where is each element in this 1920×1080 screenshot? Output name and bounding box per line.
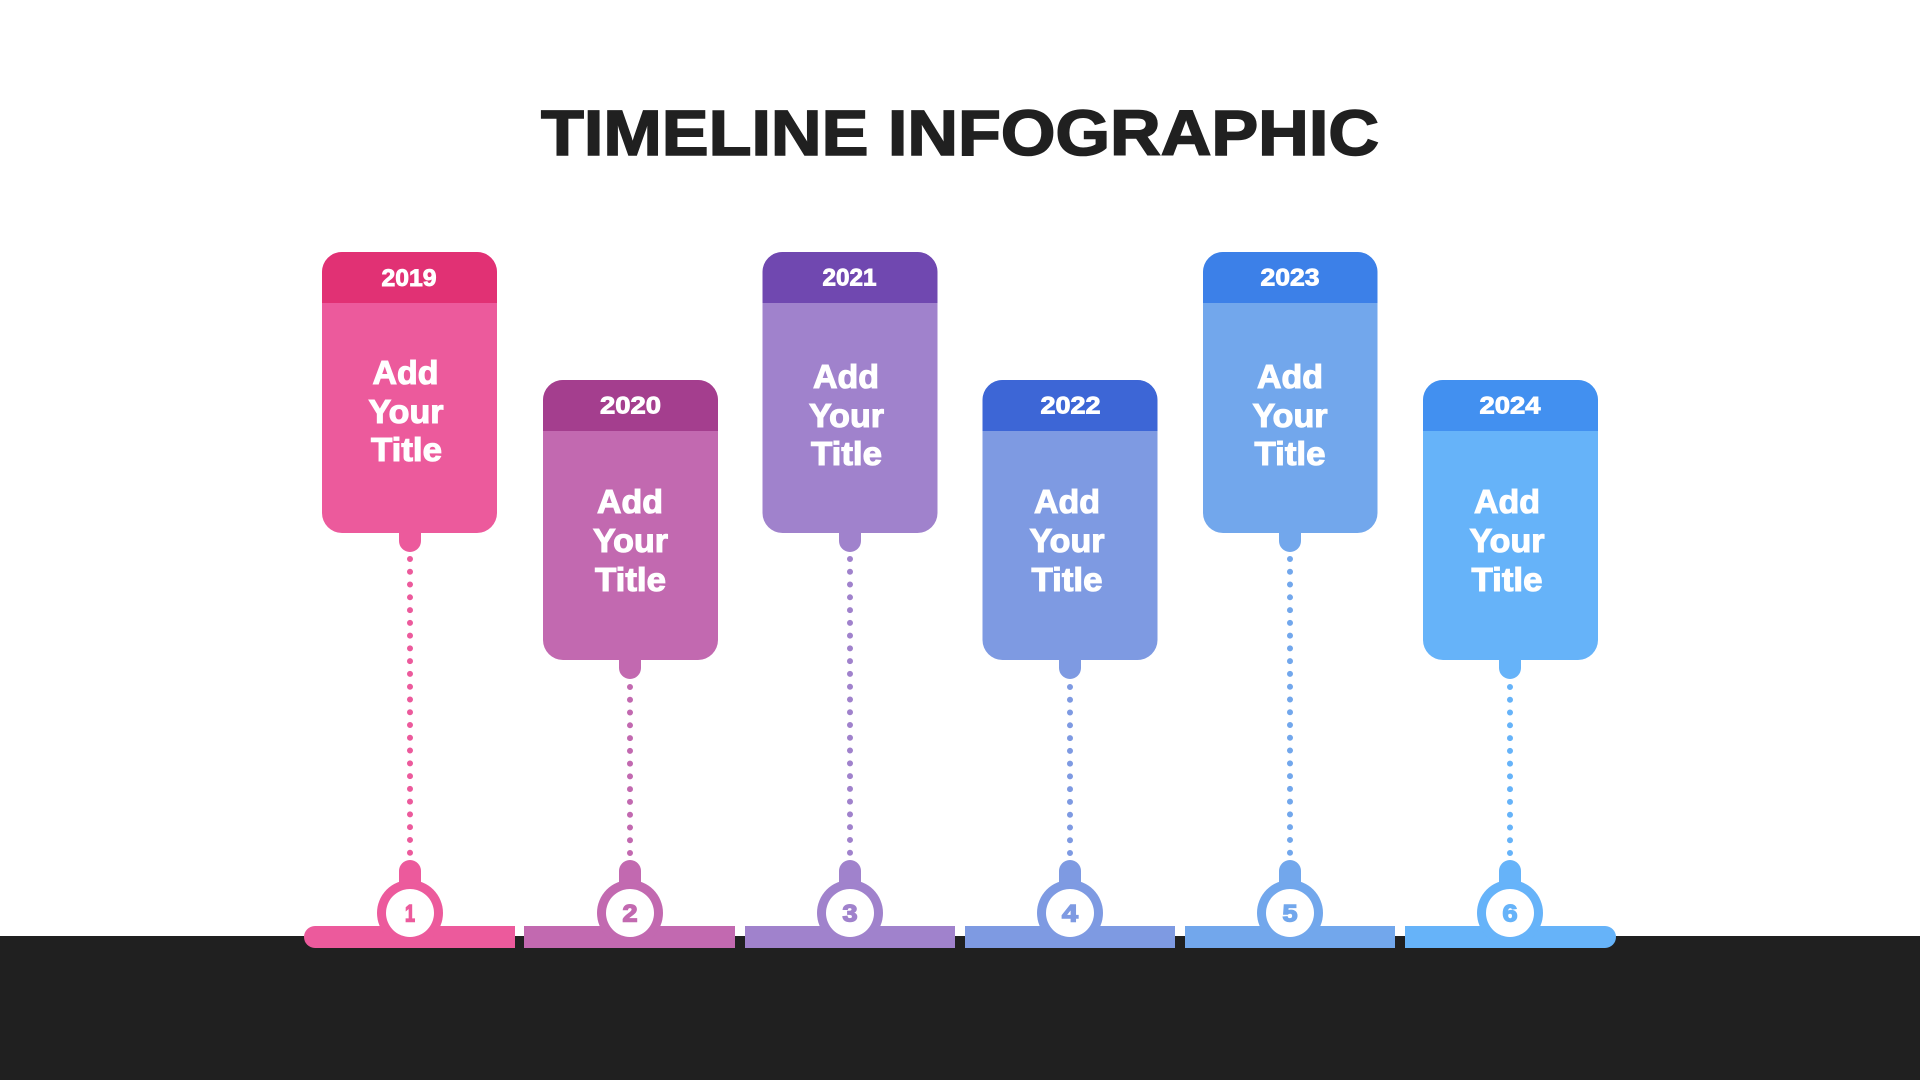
card 2022: Add — [1034, 483, 1100, 520]
dotted connector 6 — [1507, 687, 1513, 854]
card 2019: 2019 — [382, 265, 436, 292]
step 6: 2024 — [1405, 380, 1616, 948]
step 3: 2021 — [745, 252, 955, 948]
card 2020: Title — [595, 561, 666, 598]
step 4: 2022 — [965, 380, 1175, 948]
card 2024: Title — [1472, 561, 1542, 598]
number marker 4: 4 — [1062, 900, 1079, 928]
step 5: 2023 — [1185, 252, 1395, 948]
timeline bar segment 5 — [1185, 926, 1395, 948]
title: TIMELINE INFOGRAPHIC — [541, 97, 1379, 169]
dark floor band — [0, 936, 1920, 1080]
step 1: 2019 — [304, 252, 515, 948]
card 2023: Add — [1257, 358, 1323, 395]
card 2024: Your — [1470, 522, 1545, 559]
card 2019: Title — [371, 431, 442, 468]
card 2020 — [543, 380, 718, 679]
card 2020: Add — [597, 483, 663, 520]
card 2022: Your — [1030, 522, 1105, 559]
card 2021: Add — [813, 358, 879, 395]
dotted connector 2 — [627, 687, 633, 854]
card 2021: Your — [809, 397, 884, 434]
card 2023: 2023 — [1260, 264, 1320, 292]
card 2019: Your — [368, 393, 444, 430]
card 2021: 2021 — [822, 264, 876, 292]
card 2023: Title — [1254, 435, 1326, 472]
card 2024: 2024 — [1480, 392, 1541, 420]
card 2021 — [762, 252, 938, 552]
card 2022: 2022 — [1040, 392, 1100, 420]
dotted connector 5 — [1287, 559, 1293, 854]
dotted connector 4 — [1067, 687, 1073, 854]
number marker 1: 1 — [405, 900, 415, 928]
number marker 4 — [1037, 860, 1103, 946]
card 2024: Add — [1474, 483, 1540, 520]
timeline bar segment 3 — [745, 926, 955, 948]
timeline bar segment 1 — [304, 926, 515, 948]
number marker 5 — [1257, 860, 1323, 946]
number marker 1 — [377, 860, 443, 946]
number marker 3: 3 — [842, 900, 858, 928]
number marker 2 — [597, 860, 663, 946]
card 2022: Title — [1032, 561, 1102, 598]
card 2019: Add — [372, 354, 438, 391]
dotted connector 3 — [847, 559, 853, 854]
number marker 6: 6 — [1502, 900, 1518, 928]
dotted connector 1 — [407, 559, 413, 854]
card 2020: 2020 — [600, 392, 661, 420]
card 2021: Title — [811, 435, 882, 472]
card 2023: Your — [1252, 397, 1328, 434]
number marker 6 — [1477, 860, 1543, 946]
timeline bar segment 2 — [524, 926, 735, 948]
timeline bar segment 6 — [1405, 926, 1616, 948]
card 2020: Your — [593, 522, 668, 559]
card 2024 — [1423, 380, 1598, 679]
card 2022 — [982, 380, 1158, 679]
step 2: 2020 — [524, 380, 735, 948]
card 2023 — [1203, 252, 1378, 552]
timeline bar segment 4 — [965, 926, 1175, 948]
number marker 3 — [817, 860, 883, 946]
number marker 5: 5 — [1282, 900, 1298, 928]
card 2019 — [322, 252, 497, 552]
number marker 2: 2 — [622, 900, 638, 928]
